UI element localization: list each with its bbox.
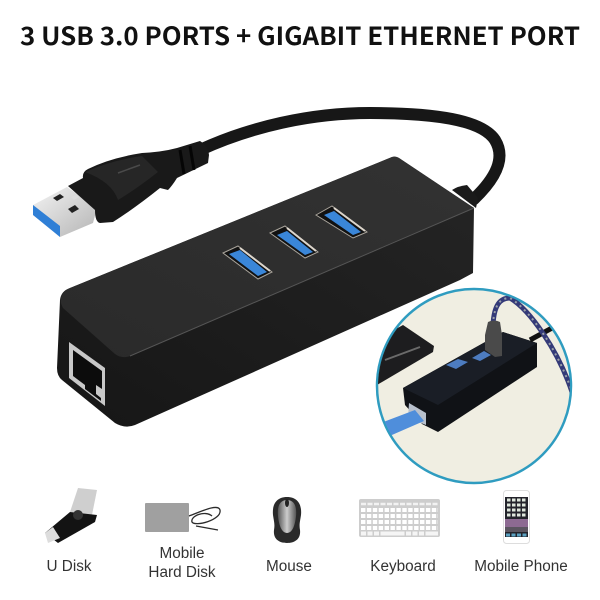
compatible device: Mouse (266, 497, 312, 575)
braided cable (493, 298, 572, 392)
label: Mobile Phone: Mobile Phone (474, 558, 568, 575)
title: 3 USB 3.0 PORTS + GIGABIT ETHERNET PORT (20, 17, 580, 53)
blue ethernet plug (385, 410, 424, 435)
inset photo: hub in use (377, 289, 572, 483)
icon: USB stick (45, 488, 97, 543)
USB 3.0 port 2 (270, 226, 318, 258)
icon: hard disk (145, 503, 220, 532)
USB 3.0 port 3 (316, 206, 367, 238)
icon: phone (504, 490, 530, 544)
label: U Disk: U Disk (46, 558, 92, 575)
cable (200, 113, 499, 199)
icon: keyboard (359, 499, 440, 537)
label: Mobile Hard Disk: Hard Disk (148, 564, 216, 581)
USB 3.0 port 1 (223, 246, 272, 279)
USB plug (33, 141, 209, 237)
hub body (57, 157, 474, 427)
mini hub (403, 332, 537, 432)
compatible device: Mobile Hard Disk (145, 503, 220, 581)
compatible device: U Disk (45, 488, 97, 575)
cable connector (485, 320, 502, 357)
icon: mouse (273, 497, 301, 543)
label: Keyboard: Keyboard (370, 558, 436, 575)
label: Mouse: Mouse (266, 558, 312, 575)
ethernet frame in inset (408, 403, 426, 425)
dark device in inset (377, 325, 434, 385)
cable collar (452, 185, 478, 208)
product: USB hub with cable (33, 113, 499, 427)
compatible device: Mobile Phone (474, 490, 568, 575)
compatible device: Keyboard (359, 499, 440, 575)
ethernet port (69, 342, 105, 406)
label: Mobile Hard Disk: Mobile (159, 545, 205, 562)
